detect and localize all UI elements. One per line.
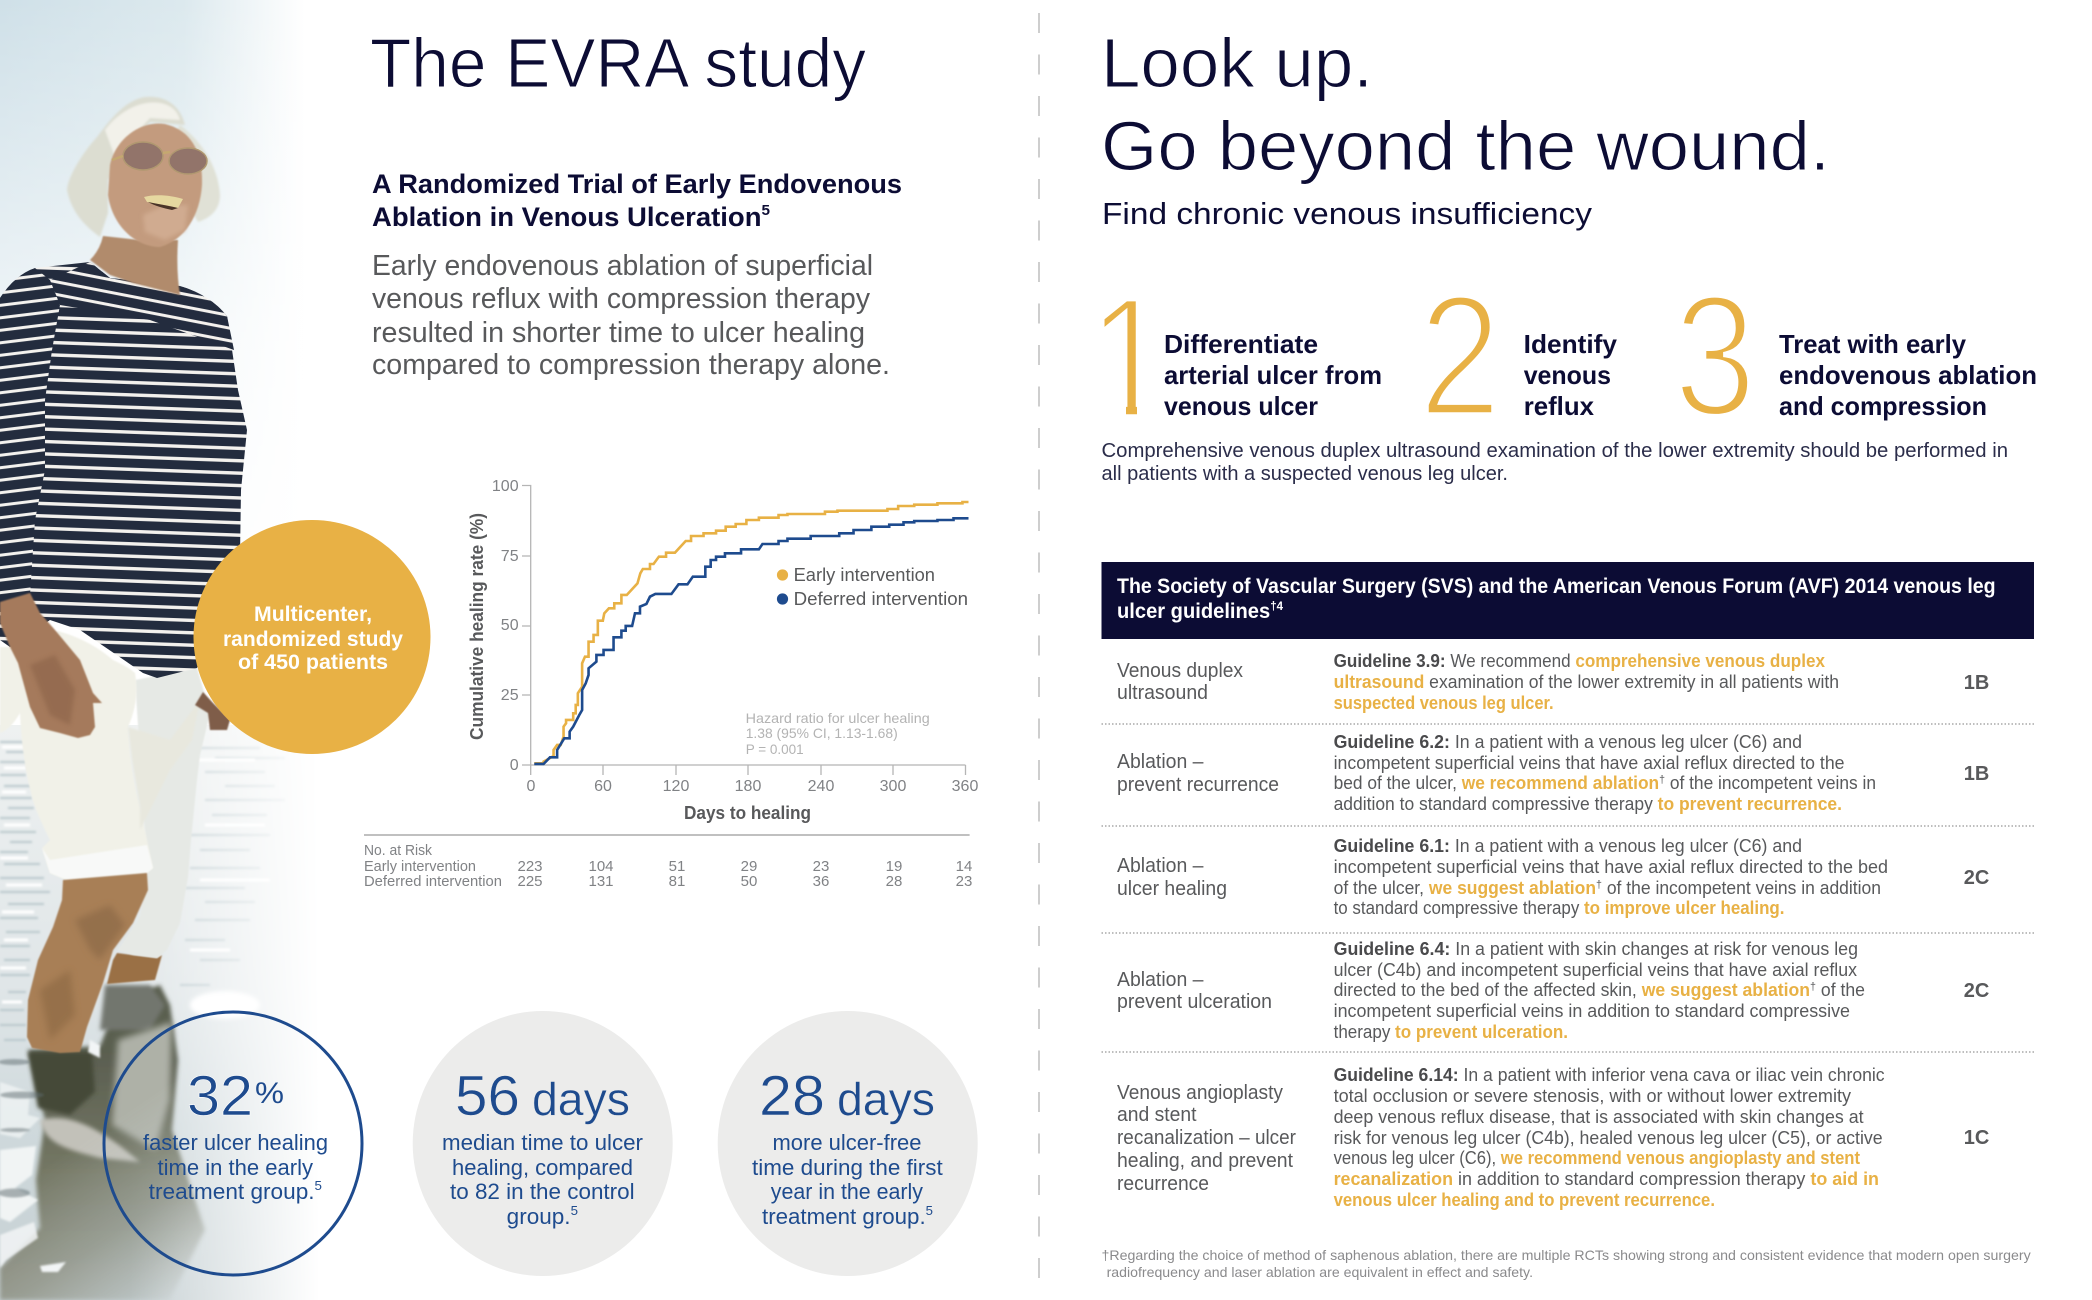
row: ablation prevent ulceration: ulcer (C4b) and incompetent superficial veins that have axial reflux	[1334, 960, 1857, 980]
pant fold shading	[128, 700, 200, 830]
x axis labels: 120	[663, 778, 689, 795]
row: ablation ulcer healing: †	[1596, 879, 1602, 891]
step 2	[1419, 260, 1618, 452]
x axis labels: 0	[527, 778, 536, 795]
x axis labels: 240	[808, 778, 834, 795]
table: number at risk: 131	[588, 873, 614, 890]
step 1	[1104, 301, 1380, 416]
x axis labels: 300	[880, 778, 906, 795]
row dividers	[1102, 724, 2034, 1052]
row: venous angioplasty and stent: venous ulcer healing and to prevent recurrence.	[1334, 1190, 1715, 1210]
x axis title: Days to healing	[684, 803, 811, 823]
table header: The Society of Vascular Surgery (SVS) and the American Venous Forum (AVF) 2014 venous leg	[1117, 575, 1996, 598]
table: number at risk: 28	[886, 873, 902, 890]
text block: duplex ultrasound recommendation: all patients with a suspected venous leg ulcer.	[1102, 463, 1508, 485]
hair	[67, 97, 220, 237]
y axis labels: 100	[492, 478, 519, 495]
divider: dashed line	[1038, 13, 1040, 1292]
row: venous angioplasty and stent: recanalization – ulcer	[1117, 1127, 1296, 1149]
stat circle: 56 days: to 82 in the control	[450, 1179, 635, 1204]
row: ablation prevent recurrence: of the incompetent veins in	[1665, 773, 1876, 793]
y axis labels: 50	[501, 617, 519, 634]
stat circle: 28 days: 5	[926, 1203, 933, 1218]
stat circle: 56 days: group.	[507, 1204, 569, 1229]
legend	[777, 565, 968, 609]
step 3: Treat with early	[1779, 329, 1967, 359]
axes	[522, 486, 966, 775]
hazard ratio note: Hazard ratio for ulcer healing	[746, 710, 930, 726]
photo: woman wading in water	[0, 0, 400, 1300]
step 1: Differentiate	[1164, 329, 1318, 359]
stat circle: 28 days: days	[837, 1073, 935, 1125]
row: venous duplex ultrasound: ultrasound	[1117, 682, 1208, 704]
face	[108, 123, 202, 247]
study subtitle	[372, 169, 902, 232]
row: ablation ulcer healing: of the incompetent veins in addition	[1602, 878, 1881, 898]
table: number at risk: 50	[741, 873, 757, 890]
table: number at risk: 36	[813, 873, 829, 890]
hazard ratio note	[746, 710, 930, 757]
study subtitle: 5	[762, 202, 770, 219]
study summary paragraph: resulted in shorter time to ulcer healing	[372, 317, 865, 349]
study summary paragraph: compared to compression therapy alone.	[372, 349, 890, 381]
row: venous angioplasty and stent: risk for venous leg ulcer (C4b), healed venous leg ulcer (C5), or active	[1334, 1128, 1883, 1148]
smile	[144, 195, 183, 208]
row: venous duplex ultrasound: suspected venous leg ulcer.	[1334, 693, 1554, 713]
row: venous angioplasty and stent: and stent	[1117, 1104, 1197, 1126]
step 1: venous ulcer	[1164, 391, 1318, 421]
shirt	[0, 262, 247, 678]
legend: Early intervention	[794, 565, 935, 585]
row: ablation prevent ulceration: of the	[1816, 980, 1865, 1000]
study summary paragraph: venous reflux with compression therapy	[372, 283, 870, 315]
stat circle: 28 days: time during the first	[752, 1155, 943, 1180]
hazard ratio note: 1.38 (95% CI, 1.13-1.68)	[746, 725, 898, 741]
stat circle: 56 days: 5	[571, 1203, 578, 1218]
row: ablation prevent ulceration: directed to the bed of the affected skin, we suggest ablation	[1334, 980, 1814, 1000]
row: venous angioplasty and stent: Guideline 6.14: In a patient with inferior vena cava or iliac vein chronic	[1334, 1065, 1885, 1085]
y axis title: Cumulative healing rate (%)	[467, 513, 487, 740]
step 3: endovenous ablation	[1779, 360, 2037, 390]
row: venous duplex ultrasound: ultrasound examination of the lower extremity in all patients with	[1334, 672, 1839, 692]
row: ablation ulcer healing: Ablation –	[1117, 855, 1204, 877]
row: ablation prevent ulceration	[1117, 939, 1989, 1042]
x axis labels: 60	[594, 778, 612, 795]
row: ablation prevent recurrence: 1B	[1964, 763, 1989, 785]
study subtitle: Ablation in Venous Ulceration	[372, 202, 755, 232]
row: venous angioplasty and stent: 1C	[1964, 1127, 1989, 1149]
callout: multicenter randomized study	[194, 520, 430, 754]
stat circle: 32%: time in the early	[158, 1155, 313, 1180]
row: ablation prevent ulceration: Guideline 6.4: In a patient with skin changes at risk for venous leg	[1334, 939, 1858, 959]
row: venous angioplasty and stent: venous leg ulcer (C6), we recommend venous angioplasty and stent	[1334, 1148, 1860, 1168]
curve: early intervention	[534, 502, 969, 763]
study summary paragraph: Early endovenous ablation of superficial	[372, 250, 873, 282]
study subtitle: A Randomized Trial of Early Endovenous	[372, 169, 902, 199]
text block: duplex ultrasound recommendation	[1102, 440, 2008, 485]
stat circle: 56 days: median time to ulcer	[442, 1130, 643, 1155]
row: ablation ulcer healing: of the ulcer, we suggest ablation	[1334, 878, 1601, 898]
row: venous angioplasty and stent: recanalization in addition to standard compression therapy to aid in	[1334, 1169, 1879, 1189]
front leg	[27, 873, 148, 1053]
step 3	[1674, 260, 2037, 452]
x axis labels: 180	[735, 778, 761, 795]
footnote: †Regarding the choice of method of saphenous ablation, there are multiple RCTs showing strong and consistent evidence that modern open surgery	[1102, 1247, 2031, 1263]
row: ablation prevent recurrence: Ablation –	[1117, 751, 1204, 773]
table: number at risk	[364, 835, 972, 890]
panel: EVRA study left column	[370, 24, 902, 381]
y axis labels: 0	[510, 757, 519, 774]
row: ablation prevent recurrence	[1117, 732, 1989, 814]
text block: duplex ultrasound recommendation: Comprehensive venous duplex ultrasound examination of the lower extremity should be performed in	[1102, 440, 2008, 462]
step 2: venous	[1524, 360, 1611, 390]
row: ablation ulcer healing: ulcer healing	[1117, 878, 1227, 900]
row: venous angioplasty and stent: deep venous reflux disease, that is associated with skin changes at	[1334, 1107, 1864, 1127]
table: number at risk: Deferred intervention	[364, 873, 502, 890]
right hand	[195, 692, 230, 730]
headline: Look up.	[1101, 24, 1373, 102]
table: number at risk: 225	[517, 873, 543, 890]
row: ablation prevent recurrence: †	[1659, 774, 1665, 786]
y axis labels: 25	[501, 687, 519, 704]
title: The EVRA study	[370, 24, 866, 102]
row: venous duplex ultrasound: Venous duplex	[1117, 660, 1243, 682]
panel: right column heading	[1101, 24, 1830, 231]
table header: †4	[1270, 599, 1283, 613]
headline	[1101, 24, 1830, 185]
x axis labels: 360	[952, 778, 978, 795]
table header: ulcer guidelines	[1117, 600, 1277, 623]
hazard ratio note: P = 0.001	[746, 741, 804, 757]
row: venous angioplasty and stent: Venous angioplasty	[1117, 1082, 1283, 1104]
table: number at risk: Early intervention	[364, 858, 476, 875]
table: number at risk: 104	[588, 858, 614, 875]
stat circle: 56 days: healing, compared	[452, 1155, 633, 1180]
row: ablation ulcer healing: to standard compressive therapy to improve ulcer healing.	[1334, 898, 1784, 918]
table: number at risk: 51	[669, 858, 685, 875]
row: ablation prevent ulceration: †	[1810, 981, 1816, 993]
stat circle: 32%: 5	[315, 1178, 322, 1193]
reflection in water	[0, 985, 205, 1300]
footnote: radiofrequency and laser ablation are equivalent in effect and safety.	[1107, 1264, 1533, 1280]
table: number at risk: No. at Risk	[364, 842, 432, 859]
row: venous angioplasty and stent: healing, and prevent	[1117, 1150, 1293, 1172]
curve: deferred intervention	[534, 518, 969, 764]
subheading: Find chronic venous insufficiency	[1102, 196, 1593, 231]
row: venous duplex ultrasound: Guideline 3.9: We recommend comprehensive venous duplex	[1334, 651, 1825, 671]
y axis labels: 75	[501, 548, 519, 565]
step 2: 2	[1419, 260, 1501, 452]
row: venous angioplasty and stent: recurrence	[1117, 1173, 1209, 1195]
row: ablation prevent ulceration: therapy to prevent ulceration.	[1334, 1022, 1568, 1042]
table: number at risk: 23	[956, 873, 972, 890]
row: ablation prevent recurrence: addition to standard compressive therapy to prevent recurrence.	[1334, 794, 1842, 814]
callout: multicenter randomized study: of 450 patients	[238, 651, 388, 674]
stat circle: 28 days: more ulcer-free	[772, 1130, 922, 1155]
step 1: 1	[1088, 262, 1170, 454]
stat circle: 32%: treatment group.	[149, 1179, 310, 1204]
row: ablation prevent ulceration: 2C	[1964, 980, 1989, 1002]
row: ablation prevent ulceration: incompetent superficial veins in addition to standard compressive	[1334, 1001, 1850, 1021]
footnote	[1102, 1247, 2031, 1280]
table: number at risk: 223	[517, 858, 543, 875]
back leg	[107, 953, 162, 984]
back pant leg	[118, 668, 210, 958]
panel: three steps	[1104, 298, 2036, 420]
table header	[1102, 562, 2034, 639]
row: ablation ulcer healing: Guideline 6.1: In a patient with a venous leg ulcer (C6) and	[1334, 836, 1802, 856]
stat circle: 28 days: treatment group.	[762, 1204, 923, 1229]
row: venous angioplasty and stent: total occlusion or severe stenosis, with or without lower extremity	[1334, 1086, 1851, 1106]
study summary paragraph	[372, 250, 890, 381]
row: venous duplex ultrasound: 1B	[1964, 672, 1989, 694]
row: ablation ulcer healing	[1117, 836, 1989, 918]
row: ablation ulcer healing: incompetent superficial veins that have axial reflux directed to the bed	[1334, 857, 1888, 877]
stat circle: 32%	[104, 1012, 362, 1275]
row: venous duplex ultrasound	[1117, 651, 1989, 713]
white water highlights	[0, 1040, 100, 1272]
table: number at risk: 29	[741, 858, 757, 875]
row: ablation prevent recurrence: incompetent superficial veins that have axial reflux directed to the	[1334, 753, 1844, 773]
step 3: 3	[1674, 260, 1756, 452]
sky background	[0, 0, 305, 740]
stat circle: 28 days: 28	[759, 1064, 825, 1128]
stat circle: 56 days: 56	[455, 1064, 520, 1128]
panel: SVS AVF guidelines table	[1102, 562, 2034, 1210]
row: ablation prevent ulceration: prevent ulceration	[1117, 991, 1272, 1013]
table: number at risk: 14	[956, 858, 972, 875]
stat circle: 56 days	[413, 1011, 673, 1276]
step 2: Identify	[1524, 329, 1618, 359]
row: ablation prevent ulceration: Ablation –	[1117, 969, 1204, 991]
table: number at risk: 19	[886, 858, 902, 875]
step 2: reflux	[1524, 391, 1595, 421]
callout: multicenter randomized study: randomized study	[223, 628, 403, 651]
table: number at risk: 81	[669, 873, 685, 890]
stat circle: 28 days: year in the early	[771, 1179, 923, 1204]
row: ablation prevent recurrence: bed of the ulcer, we recommend ablation	[1334, 773, 1667, 793]
table: number at risk: 23	[813, 858, 829, 875]
stat circle: 32%: faster ulcer healing	[143, 1130, 328, 1155]
step 1: arterial ulcer from	[1164, 360, 1382, 390]
chart: cumulative healing rate	[467, 478, 978, 823]
stat circle: 32%: %	[255, 1077, 284, 1110]
row: ablation ulcer healing: 2C	[1964, 867, 1989, 889]
stat circle: 28 days	[718, 1011, 978, 1276]
legend: Deferred intervention	[794, 589, 968, 609]
stat circle: 56 days: days	[532, 1073, 630, 1125]
y axis labels	[492, 478, 519, 774]
row: venous angioplasty and stent	[1117, 1065, 1989, 1210]
step 3: and compression	[1779, 391, 1987, 421]
callout: multicenter randomized study: Multicenter,	[254, 603, 372, 626]
front pant leg	[0, 631, 153, 880]
arm and hand	[0, 593, 102, 738]
x axis labels	[527, 778, 978, 795]
glasses	[112, 142, 207, 174]
neck	[90, 236, 180, 295]
row: ablation prevent recurrence: Guideline 6.2: In a patient with a venous leg ulcer (C6) and	[1334, 732, 1802, 752]
headline: Go beyond the wound.	[1101, 107, 1830, 185]
row: ablation prevent recurrence: prevent recurrence	[1117, 774, 1279, 796]
water background	[0, 725, 292, 1300]
stat circle: 32%: 32	[187, 1064, 253, 1128]
